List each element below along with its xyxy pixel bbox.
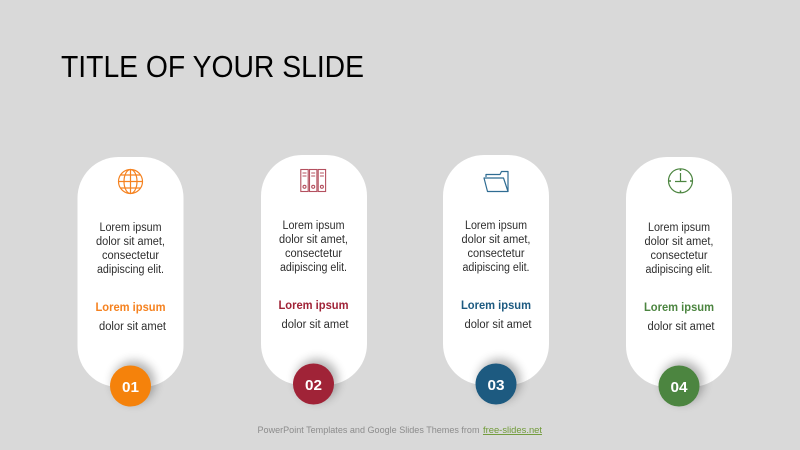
number badge 03: [476, 359, 520, 404]
card 3 body text: Lorem ipsum: [465, 220, 527, 232]
card 1 body text: dolor sit amet,: [96, 236, 165, 248]
icon: globe: [118, 170, 142, 194]
panel: card 2: [261, 155, 367, 404]
card 4 background: [626, 157, 732, 387]
card 1 body text: Lorem ipsum: [100, 222, 162, 234]
card 2 body text: [279, 220, 348, 274]
panel: card 1: [78, 157, 184, 406]
panel: card 3: [443, 155, 549, 404]
number badge 01: 01: [122, 379, 139, 396]
card 4 body text: adipiscing elit.: [646, 264, 712, 276]
card 3 heading: Lorem ipsum: [461, 298, 531, 312]
icon: binders: [301, 170, 326, 192]
card 1 subtext: dolor sit amet: [99, 321, 167, 333]
card 1 heading: Lorem ipsum: [96, 300, 166, 314]
footer credit: free-slides.net: [483, 425, 542, 436]
number badge 02: 02: [305, 377, 322, 394]
footer credit: PowerPoint Templates and Google Slides Themes from: [258, 425, 480, 436]
card 2 body text: adipiscing elit.: [280, 262, 347, 274]
icon: clock: [668, 169, 692, 193]
card 3 background: [443, 155, 549, 385]
card 4 body text: [644, 222, 714, 276]
card 2 body text: dolor sit amet,: [279, 234, 348, 246]
card 1 background: [78, 157, 184, 387]
card 1 body text: consectetur: [102, 250, 159, 262]
card 3 body text: consectetur: [468, 248, 525, 260]
panel: card 4: [626, 157, 732, 406]
number badge 03: 03: [488, 377, 504, 394]
card 3 body text: [462, 220, 530, 274]
card 4 subtext: dolor sit amet: [648, 321, 715, 333]
card 2 heading: Lorem ipsum: [278, 298, 348, 312]
title: TITLE OF YOUR SLIDE: [61, 49, 364, 84]
card 4 heading: Lorem ipsum: [644, 300, 714, 314]
number badge 02: [293, 359, 338, 404]
card 3 body text: adipiscing elit.: [462, 262, 530, 274]
card 2 body text: consectetur: [285, 248, 342, 260]
card 1 body text: [96, 222, 165, 276]
card 3 body text: dolor sit amet,: [462, 234, 530, 246]
number badge 04: [658, 361, 704, 406]
icon: folder: [484, 172, 508, 192]
card 2 body text: Lorem ipsum: [282, 220, 344, 232]
card 4 body text: dolor sit amet,: [644, 236, 714, 248]
card 4 body text: consectetur: [650, 250, 708, 262]
number badge 01: [110, 361, 155, 406]
card 3 subtext: dolor sit amet: [464, 319, 532, 331]
number badge 04: 04: [670, 379, 688, 396]
card 1 body text: adipiscing elit.: [97, 264, 164, 276]
card 2 background: [261, 155, 367, 385]
card 4 body text: Lorem ipsum: [648, 222, 710, 234]
card 2 subtext: dolor sit amet: [282, 319, 349, 331]
